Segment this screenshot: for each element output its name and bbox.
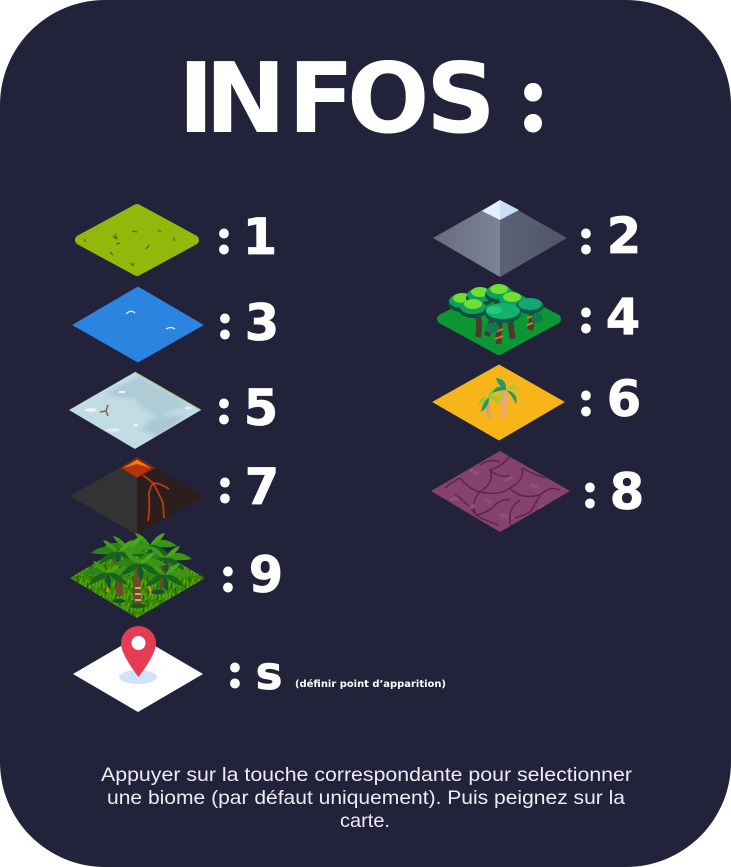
- icon: tropical tile: [70, 533, 205, 618]
- key colon 9: :: [221, 543, 235, 604]
- key colon 2: :: [579, 205, 593, 266]
- icon: forest tile: [442, 284, 556, 350]
- icon: mountain tile: [433, 200, 567, 277]
- legend row 9: tropical jungle: [70, 533, 283, 618]
- key number 6: 6: [607, 370, 641, 428]
- key number 2: 2: [607, 207, 641, 265]
- instructions text: carte.: [340, 810, 390, 832]
- key number 3: 3: [245, 294, 279, 352]
- key colon s: :: [228, 639, 242, 700]
- legend row 3: water: [73, 287, 279, 362]
- icon: ice tile: [69, 372, 201, 449]
- legend row 1: grass: [80, 205, 277, 271]
- instructions text: [101, 764, 633, 832]
- title: INFOS: [178, 42, 496, 155]
- legend row 5: ice: [69, 372, 278, 449]
- key colon 3: :: [218, 290, 232, 351]
- key colon 5: :: [217, 375, 231, 436]
- key colon 7: :: [218, 454, 232, 515]
- icon: volcano tile: [70, 457, 205, 535]
- key note: (définir point d’apparition): [295, 679, 446, 690]
- legend row 2: mountain: [433, 200, 641, 277]
- key number 9: 9: [249, 546, 283, 604]
- instructions text: une biome (par défaut uniquement). Puis peignez sur la: [107, 787, 625, 809]
- icon: spawn point pin: [73, 626, 203, 712]
- key number 4: 4: [606, 288, 640, 346]
- title: :: [520, 37, 546, 154]
- key colon 6: :: [579, 367, 593, 428]
- instructions text: Appuyer sur la touche correspondante pour selectionner: [101, 764, 633, 786]
- icon: cracked earth tile: [431, 451, 570, 532]
- key number 1: 1: [243, 208, 277, 266]
- icon: desert tile: [433, 365, 564, 440]
- key number 7: 7: [245, 458, 279, 516]
- legend row s: spawn point: [73, 626, 446, 712]
- key number 5: 5: [244, 379, 278, 437]
- legend row 7: volcano: [70, 454, 279, 535]
- key letter s: s: [256, 647, 282, 700]
- icon: grass tile: [80, 209, 194, 271]
- legend row 4: jungle forest: [442, 284, 640, 350]
- legend row 6: desert: [433, 365, 641, 440]
- key colon 8: :: [583, 459, 597, 520]
- key number 8: 8: [610, 463, 644, 521]
- legend row 8: cracked earth: [431, 451, 644, 532]
- key colon 1: :: [217, 205, 231, 266]
- key colon 4: :: [579, 284, 593, 345]
- icon: water tile: [73, 287, 203, 362]
